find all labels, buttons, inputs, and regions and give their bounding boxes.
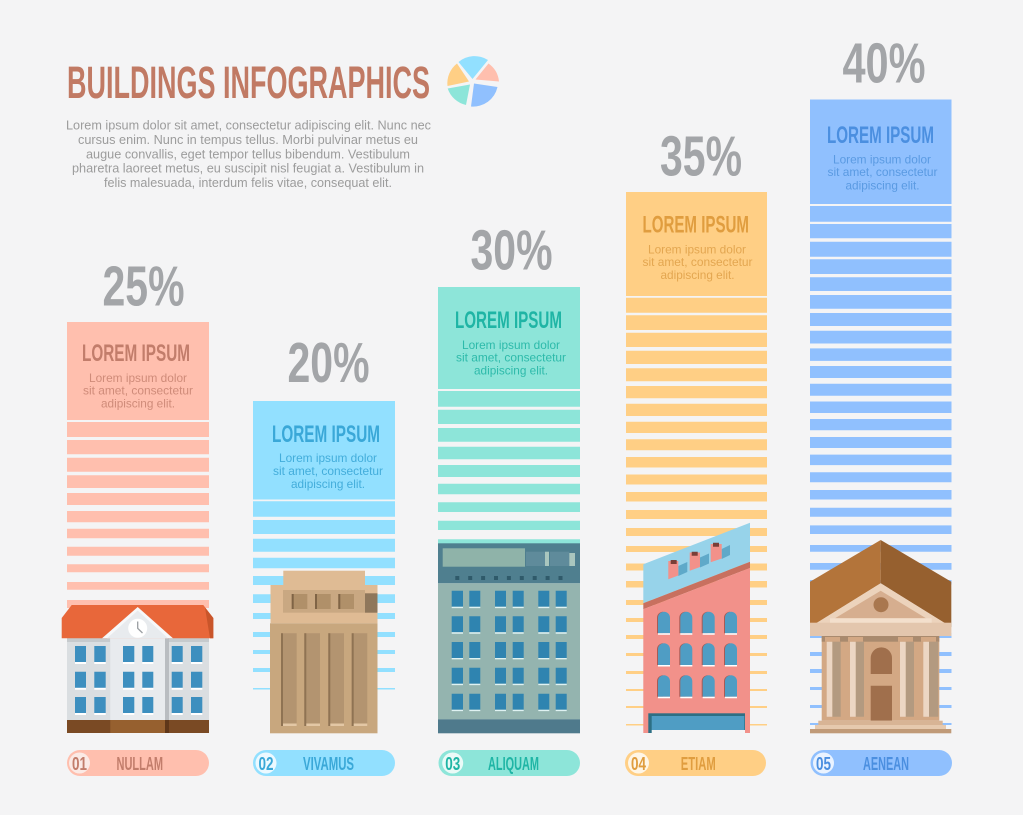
title: BUILDINGS INFOGRAPHICS bbox=[67, 57, 430, 108]
pill label 04 etiam bbox=[625, 750, 766, 776]
pill label 02 vivamus: 02 bbox=[258, 753, 274, 774]
pill label 01 nullam: NULLAM bbox=[116, 753, 163, 774]
bar 3 text: Lorem ipsum dolor bbox=[462, 338, 560, 352]
bar 3 text: adipiscing elit. bbox=[474, 364, 548, 378]
panel: column 1 nullam bbox=[62, 254, 213, 776]
pill label 05 aenean bbox=[810, 750, 952, 776]
pill label 02 vivamus bbox=[253, 750, 395, 776]
bar 3 heading: LOREM IPSUM bbox=[455, 307, 562, 334]
percentage 30%: 30% bbox=[470, 218, 552, 282]
bar 2 text: Lorem ipsum dolor bbox=[279, 451, 377, 465]
panel: column 4 etiam bbox=[625, 124, 767, 776]
bar 1 text: adipiscing elit. bbox=[101, 396, 175, 410]
bar 3 text: sit amet, consectetur bbox=[456, 350, 566, 364]
building 4: brick house with slanted roof bbox=[643, 523, 750, 733]
bar 5 with stripes bbox=[810, 100, 952, 725]
intro text block: augue convallis, eget tempor tellus bibendum. Vestibulum bbox=[86, 148, 410, 162]
intro text block: felis malesuada, interdum felis vitae, consequat elit. bbox=[104, 176, 392, 190]
bar 5 heading: LOREM IPSUM bbox=[827, 122, 934, 149]
bar 2 text: adipiscing elit. bbox=[291, 477, 365, 491]
pill label 03 aliquam: ALIQUAM bbox=[488, 753, 539, 774]
bar 5 text: Lorem ipsum dolor bbox=[833, 152, 931, 166]
panel: column 2 vivamus bbox=[253, 331, 395, 776]
bar 5 text bbox=[828, 152, 938, 192]
bar 4 heading: LOREM IPSUM bbox=[642, 212, 749, 238]
building 2: office block bbox=[270, 571, 378, 733]
pill label 01 nullam: 01 bbox=[72, 753, 87, 774]
pill label 04 etiam: 04 bbox=[631, 753, 647, 774]
percentage 35%: 35% bbox=[660, 124, 742, 188]
bar 1 text bbox=[83, 371, 193, 410]
bar 4 text: sit amet, consectetur bbox=[642, 255, 752, 269]
bar 1 text: Lorem ipsum dolor bbox=[89, 371, 187, 385]
bar 2 text bbox=[273, 451, 383, 491]
bar 5 text: sit amet, consectetur bbox=[828, 165, 938, 179]
panel: column 3 aliquam bbox=[438, 218, 580, 776]
pill label 01 nullam bbox=[67, 750, 209, 776]
pill label 03 aliquam: 03 bbox=[445, 753, 460, 774]
percentage 20%: 20% bbox=[288, 331, 370, 395]
pill label 04 etiam: ETIAM bbox=[681, 753, 716, 774]
pill label 05 aenean: AENEAN bbox=[863, 753, 909, 774]
intro text block: pharetra laoreet metus, eu suscipit nisl feugiat a. Vestibulum in bbox=[72, 162, 424, 176]
bar 4 text: adipiscing elit. bbox=[660, 268, 734, 282]
bar 4 text: Lorem ipsum dolor bbox=[648, 242, 746, 256]
building 1: school with clock bbox=[62, 605, 213, 733]
bar 2 heading: LOREM IPSUM bbox=[272, 421, 380, 448]
building 3: apartment tower bbox=[438, 543, 580, 733]
bar 3 with stripes bbox=[438, 287, 580, 545]
pill label 03 aliquam bbox=[438, 750, 580, 776]
bar 2 text: sit amet, consectetur bbox=[273, 464, 383, 478]
intro text block bbox=[66, 118, 431, 190]
bar 4 text bbox=[642, 242, 752, 282]
bar 4 with stripes bbox=[626, 192, 767, 726]
intro text block: Lorem ipsum dolor sit amet, consectetur adipiscing elit. Nunc nec bbox=[66, 118, 431, 132]
pill label 02 vivamus: VIVAMUS bbox=[303, 753, 354, 774]
bar 3 text bbox=[456, 338, 566, 378]
bar 2 with stripes bbox=[253, 401, 395, 690]
bar 1 text: sit amet, consectetur bbox=[83, 384, 193, 398]
icon: pie chart bbox=[447, 56, 499, 107]
bar 1 heading: LOREM IPSUM bbox=[82, 340, 190, 367]
percentage 25%: 25% bbox=[102, 254, 184, 318]
intro text block: cursus enim. Nunc in tempus tellus. Morbi pulvinar metus eu bbox=[78, 133, 418, 147]
panel: column 5 aenean bbox=[810, 32, 952, 776]
bar 1 with stripes bbox=[67, 322, 209, 608]
bar 5 text: adipiscing elit. bbox=[846, 178, 920, 192]
pill label 05 aenean: 05 bbox=[816, 753, 831, 774]
percentage 40%: 40% bbox=[842, 32, 926, 96]
building 5: classical bank bbox=[810, 540, 951, 733]
